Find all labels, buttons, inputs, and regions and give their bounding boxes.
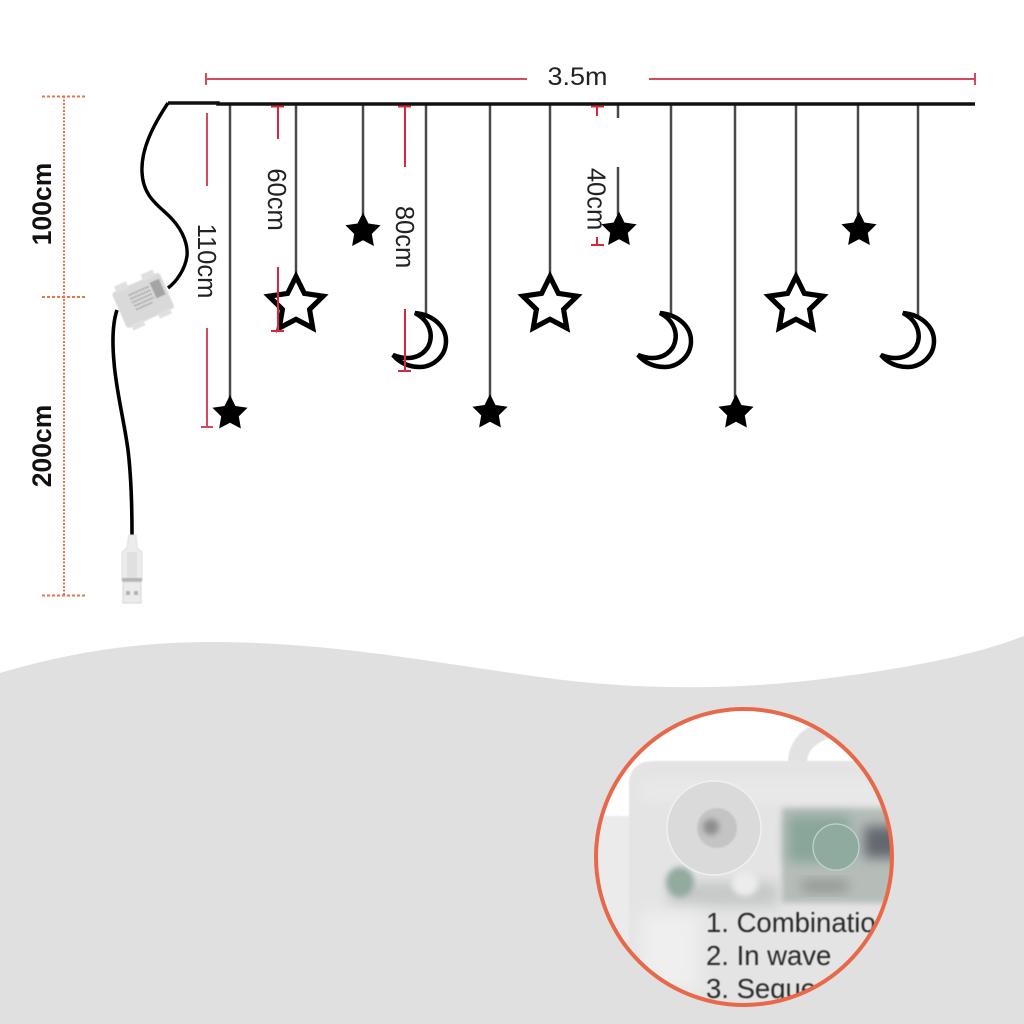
grey wave background xyxy=(0,636,1024,1024)
dimension: 60cm xyxy=(262,106,290,331)
circular detail photo of controller xyxy=(590,709,902,1020)
charm: outline star 3 xyxy=(769,276,823,328)
component circle on board xyxy=(813,824,859,870)
printed instructions: 1. Combination xyxy=(706,907,891,938)
power cable to controller xyxy=(142,103,187,288)
dimension: 80cm: 80cm xyxy=(390,206,418,268)
label: 100cm: 100cm xyxy=(27,163,57,245)
label: 200cm: 200cm xyxy=(27,405,57,487)
orange ring xyxy=(596,709,892,1005)
width dimension: 3.5m xyxy=(206,63,975,91)
printed instructions: 3. Sequential xyxy=(706,973,867,1004)
lower shaded band xyxy=(668,882,778,906)
printed instructions: 2. In wave xyxy=(706,940,831,971)
charm: filled star 4 xyxy=(601,212,637,245)
suction cup xyxy=(667,781,761,875)
charm: outline star 1 xyxy=(269,276,323,328)
width dimension: 3.5m: 3.5m xyxy=(548,63,608,91)
overall height dimension xyxy=(27,96,87,596)
charm: filled star 5 xyxy=(718,394,754,427)
charm: filled star 6 xyxy=(841,212,877,245)
charm: moon 2 xyxy=(638,313,691,367)
dimension: 60cm: 60cm xyxy=(262,168,290,231)
translucent controller body xyxy=(628,760,883,1003)
hanging strings xyxy=(230,104,918,400)
dimension: 40cm: 40cm xyxy=(582,168,610,230)
charm: moon 3 xyxy=(881,313,934,367)
dimension: 40cm xyxy=(582,106,610,245)
dimension: 80cm xyxy=(390,106,418,371)
charm: moon 1 xyxy=(393,313,446,367)
charm: filled star 2 xyxy=(345,212,381,246)
controller box xyxy=(109,267,177,333)
top horizontal cable xyxy=(168,103,975,104)
USB plug xyxy=(122,535,142,603)
dimension: 110cm xyxy=(192,113,220,427)
charm: outline star 2 xyxy=(523,276,577,328)
small green patch left xyxy=(666,867,694,897)
charm: filled star 1 xyxy=(212,395,248,428)
printed instructions xyxy=(706,911,875,1000)
green circuit board xyxy=(782,808,902,903)
USB cable xyxy=(113,310,132,535)
dimension: 110cm: 110cm xyxy=(192,224,220,298)
wire loop behind box xyxy=(797,729,826,766)
charm: filled star 3 xyxy=(472,394,508,427)
left clip tab xyxy=(598,816,629,946)
